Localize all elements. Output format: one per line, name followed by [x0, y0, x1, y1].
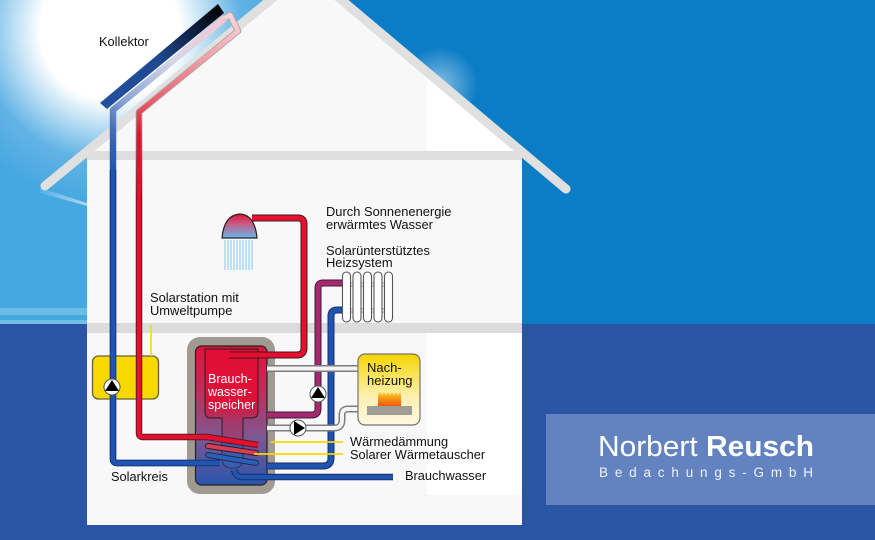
solar circuit cold pipe: [113, 18, 225, 463]
background: sky: [0, 0, 875, 324]
background: lower blue band: [0, 324, 875, 540]
label: Durch Sonnenenergie erwärmtes Wasser: Durch Sonnenenergie: [326, 204, 451, 219]
shower head: [222, 214, 257, 270]
heating flow pipe (purple): [267, 283, 345, 415]
pump: solar station: [104, 379, 120, 395]
pump: auxiliary heater: [290, 420, 306, 436]
storage tank: [187, 337, 275, 494]
roof: [45, 0, 566, 189]
label: Brauchwasserspeicher: speicher: [208, 398, 255, 412]
label: Durch Sonnenenergie erwärmtes Wasser: erwärmtes Wasser: [326, 217, 434, 232]
logo panel: Norbert Reusch: [598, 431, 814, 463]
auxiliary heater: Nach-: [367, 360, 402, 375]
label: Solarunterstütztes Heizsystem: Solarünterstütztes: [326, 243, 430, 258]
logo panel: [546, 414, 875, 505]
label: Brauchwasserspeicher: Brauch-: [208, 372, 252, 386]
label: Brauchwasser: Brauchwasser: [405, 468, 487, 483]
solar station with pump: [92, 325, 158, 399]
auxiliary heater: [358, 354, 420, 425]
label: Solarstation mit Umweltpumpe: Umweltpumpe: [150, 303, 232, 318]
label: Kollektor: Kollektor: [99, 34, 150, 49]
label: Solarunterstütztes Heizsystem: Heizsystem: [326, 255, 393, 270]
label: Brauchwasserspeicher: wasser-: [207, 385, 252, 399]
domestic water outlet pipe: [234, 470, 393, 477]
house body: [87, 0, 522, 525]
label: Wärmedämmung: Wärmedämmung: [350, 434, 448, 449]
yellow leader lines: [254, 442, 343, 454]
label: Solarkreis: Solarkreis: [111, 469, 168, 484]
auxiliary heater: heizung: [367, 373, 413, 388]
label: Solarstation mit Umweltpumpe: Solarstation mit: [150, 290, 239, 305]
heat exchanger coils: [208, 446, 256, 463]
auxiliary heater grey pipes: [267, 368, 358, 428]
hot water pipe to shower: [229, 218, 304, 355]
solar collector: [100, 4, 224, 109]
radiator: [342, 272, 392, 322]
heating return and cold water pipe (blue): [267, 310, 345, 466]
label: Solarer Wärmetauscher: Solarer Wärmetauscher: [350, 447, 486, 462]
solar circuit hot pipe: [139, 15, 258, 445]
logo panel: Bedachungs-GmbH: [599, 465, 813, 480]
pump: heating circuit: [310, 386, 326, 402]
